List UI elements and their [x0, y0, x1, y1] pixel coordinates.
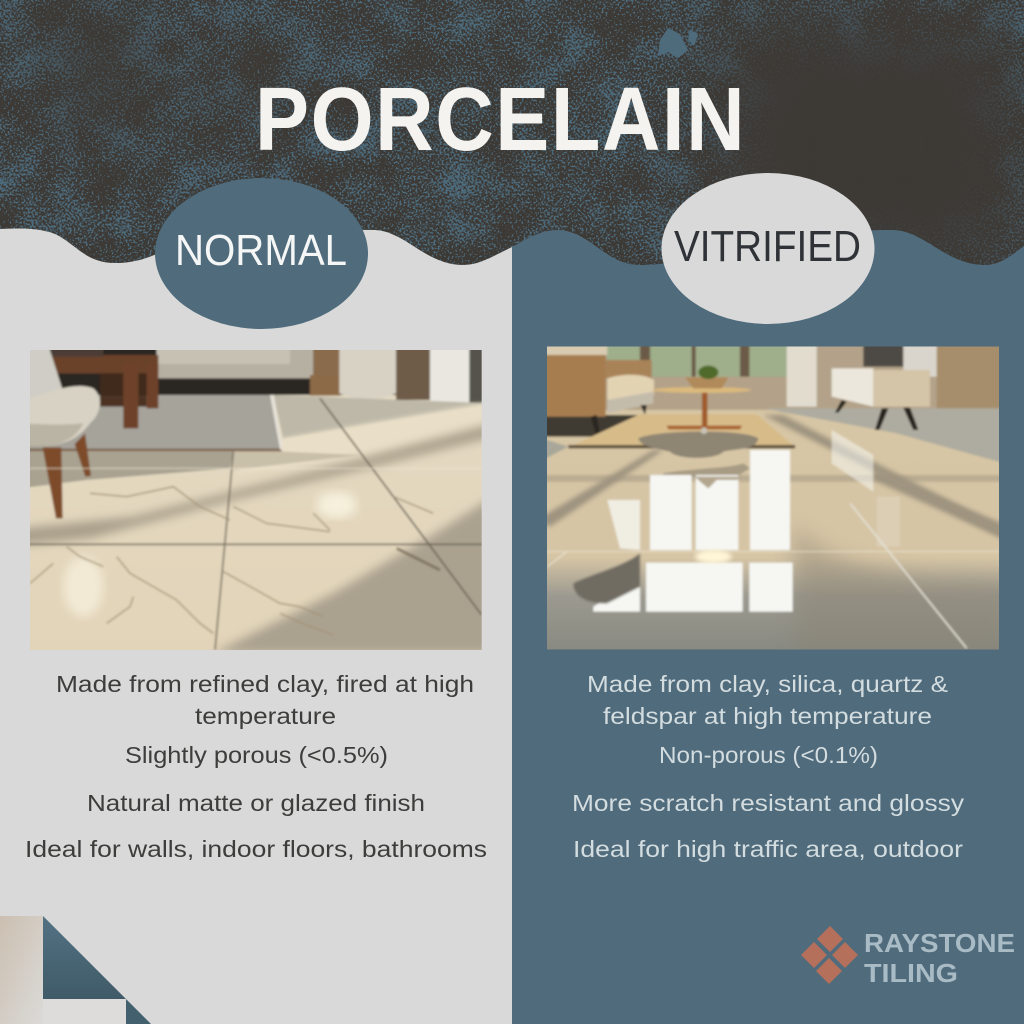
image: normal porcelain marble floor — [30, 350, 482, 650]
coffee table — [50, 347, 158, 428]
room backdrop — [547, 346, 999, 462]
image: vitrified porcelain glossy floor — [537, 340, 1010, 660]
reflected plant — [695, 477, 743, 488]
text block: vitrified porcelain properties: More scratch resistant and glossy — [572, 790, 964, 816]
text block: vitrified porcelain properties: Made from clay, silica, quartz & — [587, 671, 948, 697]
text block: vitrified porcelain properties: Ideal for high traffic area, outdoor — [573, 836, 963, 862]
header textured background — [0, 0, 1024, 265]
marble veins — [30, 487, 440, 635]
panel: vitrified porcelain background — [512, 230, 1024, 1024]
grout lines — [537, 503, 1010, 648]
badge: normal: NORMAL — [175, 226, 347, 275]
sofa — [547, 346, 655, 438]
text block: vitrified porcelain properties: Non-porous (<0.1%) — [659, 742, 878, 768]
logo: Raystone Tiling — [801, 926, 1015, 988]
shadow bands — [20, 423, 493, 545]
badge: vitrified: VITRIFIED — [674, 222, 861, 271]
table shadow — [638, 431, 758, 458]
text block: normal porcelain properties: Natural matte or glazed finish — [87, 790, 425, 816]
armchair — [30, 350, 102, 520]
logo: Raystone Tiling: RAYSTONE — [864, 928, 1015, 958]
badge: vitrified — [662, 173, 874, 324]
corner decoration — [0, 916, 151, 1024]
text block: normal porcelain properties: Slightly porous (<0.5%) — [125, 742, 388, 768]
shaded floor at the back — [273, 395, 493, 438]
badge: normal — [155, 178, 368, 329]
panel: normal porcelain background — [0, 229, 512, 1024]
media cabinet — [832, 368, 930, 430]
text block: vitrified porcelain properties — [572, 671, 964, 862]
rug — [20, 395, 282, 450]
coffee table — [652, 366, 751, 434]
logo: Raystone Tiling: TILING — [864, 958, 958, 988]
title: PORCELAIN — [255, 69, 745, 170]
rug — [570, 414, 795, 447]
text block: normal porcelain properties: Ideal for walls, indoor floors, bathrooms — [25, 836, 487, 862]
grout lines — [20, 398, 493, 650]
text block: vitrified porcelain properties: feldspar at high temperature — [603, 703, 932, 729]
room backdrop — [49, 350, 482, 404]
text block: normal porcelain properties: temperature — [195, 703, 336, 729]
text block: normal porcelain properties: Made from refined clay, fired at high — [56, 671, 474, 697]
window reflections — [593, 430, 900, 612]
text block: normal porcelain properties — [25, 671, 487, 862]
floor shadows — [547, 412, 999, 640]
